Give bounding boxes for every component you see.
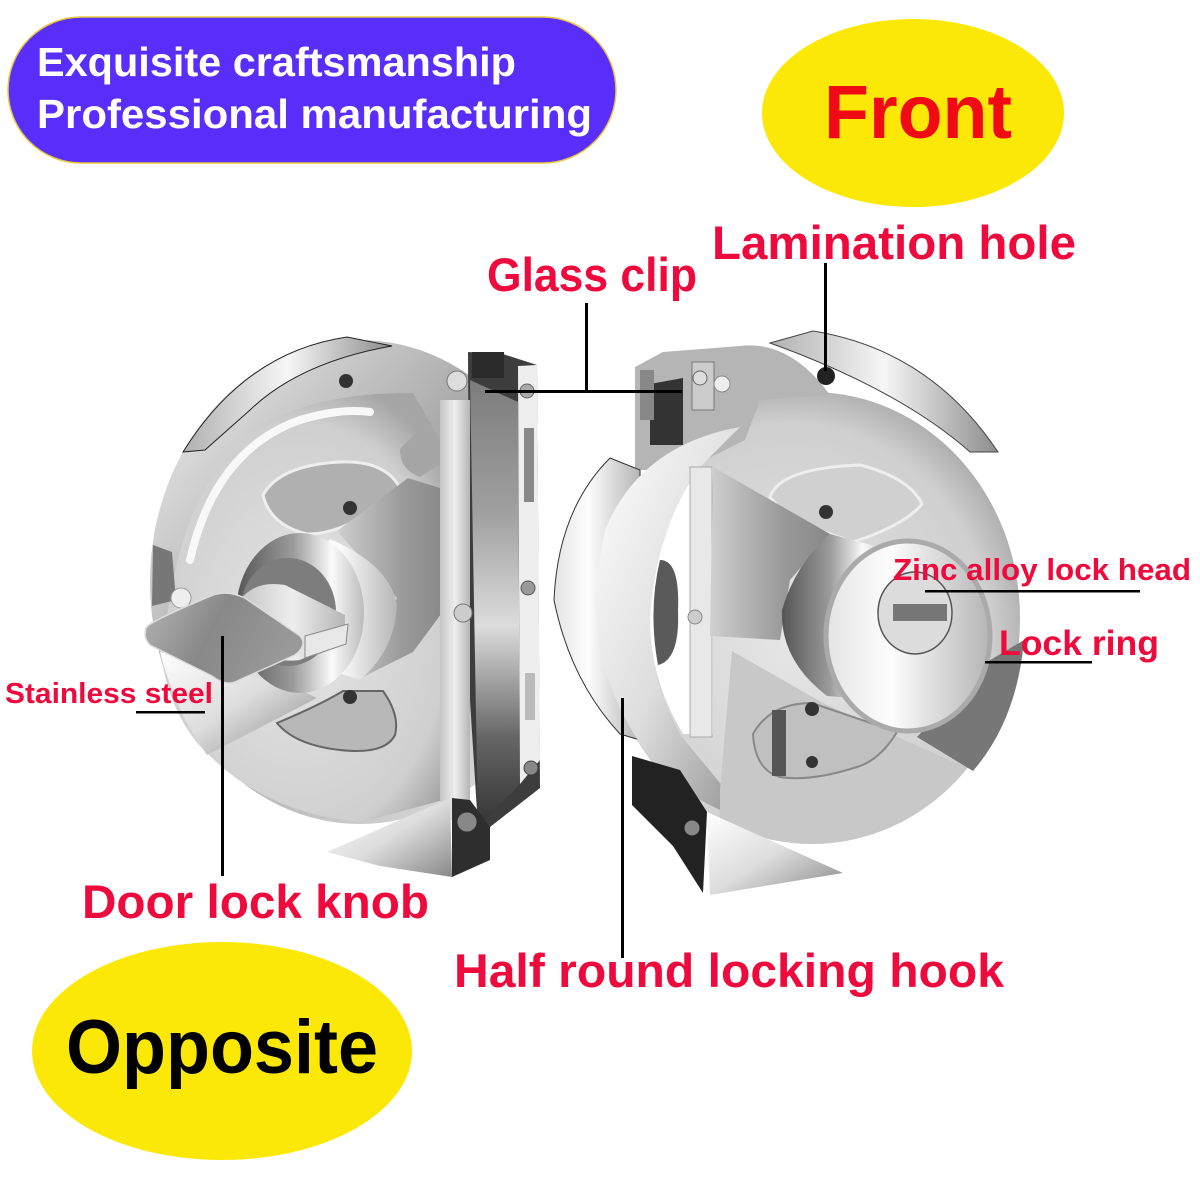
- callout: Door lock knob: Door lock knob: [82, 875, 429, 928]
- triangular plate: [710, 467, 830, 640]
- cylinder: [300, 539, 397, 680]
- badge: Opposite: Opposite: [66, 1005, 378, 1090]
- lock illustration: opposite side: [145, 337, 570, 877]
- lamination hole: [817, 367, 835, 385]
- bottom plate: [452, 798, 490, 877]
- main disc: [604, 392, 1020, 844]
- callout: Half round locking hook: Half round locking hook: [454, 944, 1005, 997]
- upper hole: [263, 462, 400, 534]
- bottom blade: [707, 812, 843, 895]
- lower hole: [277, 691, 396, 751]
- hole dot top: [339, 374, 353, 388]
- top dark: [472, 352, 504, 378]
- back disc: [150, 340, 475, 824]
- bottom dark plates: [632, 756, 707, 893]
- lower grey wedge: [160, 652, 317, 755]
- badge: Exquisite craftsmanship: Exquisite craftsmanship: [37, 39, 516, 85]
- side clip: [152, 545, 176, 606]
- knob: [145, 593, 303, 683]
- ring opening: [650, 467, 713, 734]
- badge: Front: Front: [824, 70, 1012, 155]
- plate groove: [190, 411, 370, 560]
- dark recess: [653, 560, 678, 665]
- callout: Lamination hole: Lamination hole: [712, 216, 1076, 269]
- cylinder: [782, 534, 890, 700]
- lock illustration: front side: [554, 331, 1024, 895]
- callout: Lamination hole: [712, 216, 1076, 371]
- upper body: [635, 345, 830, 470]
- front ring: [597, 427, 760, 830]
- right wedge: [917, 640, 1024, 771]
- lock face: [826, 541, 990, 731]
- callout: Door lock knob: [82, 636, 429, 928]
- dark glass-clip plate: [650, 378, 683, 445]
- callout: Stainless steel: Stainless steel: [5, 678, 213, 710]
- callout: Glass clip: [485, 248, 697, 393]
- back half round: [554, 458, 640, 740]
- inner strip: [690, 467, 712, 737]
- bottom blade: [327, 798, 452, 877]
- top blade: [770, 331, 998, 452]
- front bar: [470, 380, 520, 827]
- badge: Exquisite craftsmanship: [8, 17, 616, 163]
- inner plate: [440, 400, 470, 820]
- metal body: [468, 352, 540, 827]
- keyhole: [878, 572, 952, 654]
- lower hole: [753, 703, 897, 778]
- triangular plate: [337, 478, 447, 677]
- callout: Glass clip: Glass clip: [487, 248, 697, 301]
- callout: Lock ring: Lock ring: [999, 624, 1159, 663]
- badge: Exquisite craftsmanship: Professional manufacturing: [37, 91, 592, 137]
- callout: Zinc alloy lock head: Zinc alloy lock head: [893, 552, 1191, 587]
- screws: [447, 371, 467, 391]
- lever: [400, 432, 447, 477]
- badge: Opposite: [32, 942, 412, 1160]
- callout: Half round locking hook: [454, 698, 1005, 997]
- upper hole: [770, 465, 922, 542]
- lower plate: [720, 651, 966, 844]
- badge: Front: [762, 19, 1064, 207]
- top blade: [183, 337, 392, 452]
- right strip: [518, 365, 540, 784]
- pin: [305, 624, 348, 658]
- front plate: [160, 393, 470, 822]
